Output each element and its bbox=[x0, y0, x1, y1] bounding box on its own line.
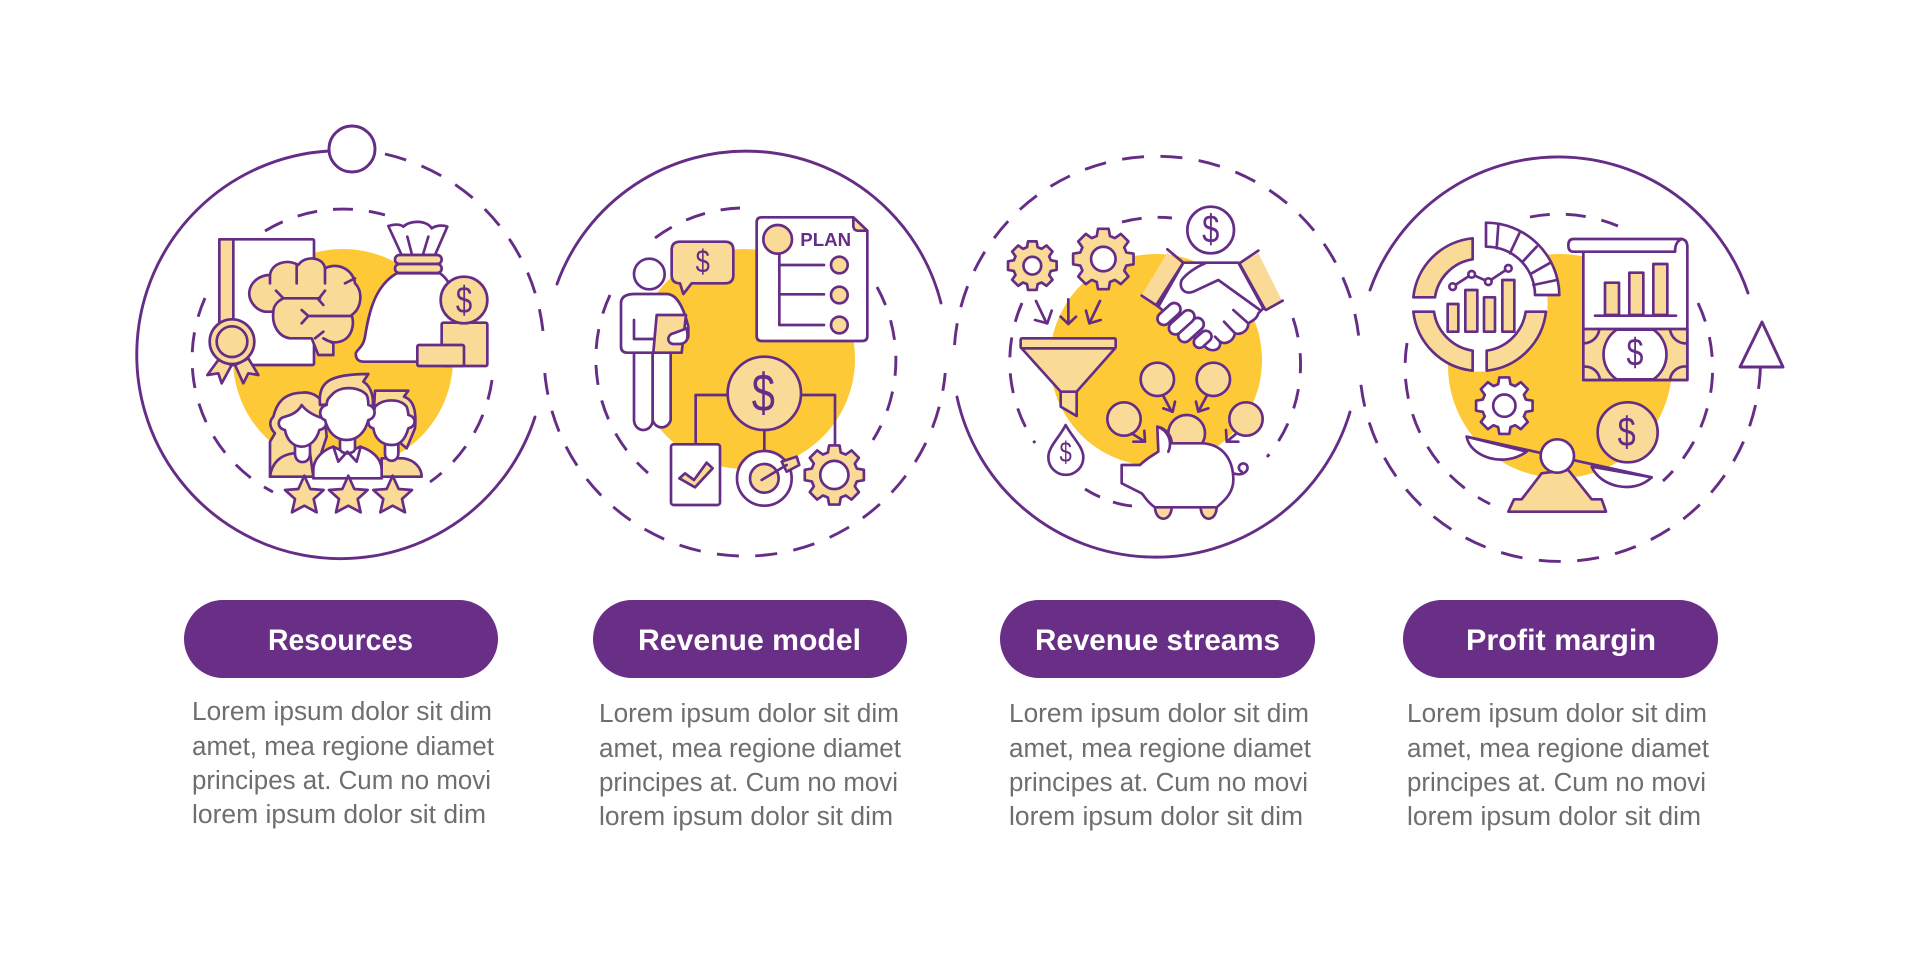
icon: dollar coin: $ bbox=[1618, 408, 1636, 455]
flow connector lines bbox=[696, 395, 835, 453]
icon: revenue model illustration bbox=[621, 217, 867, 506]
text block: profit margin: Lorem ipsum dolor sit dim bbox=[1407, 700, 1707, 728]
icon: central dollar coin bbox=[728, 357, 801, 430]
text block: revenue streams: principes at. Cum no movi bbox=[1009, 769, 1308, 797]
heading pill: Revenue model bbox=[593, 600, 907, 678]
icon: two gears bbox=[1008, 229, 1134, 290]
arrows into funnel bbox=[1035, 299, 1101, 324]
text block: resources: principes at. Cum no movi bbox=[192, 767, 491, 795]
icon: plan document: PLAN bbox=[800, 229, 851, 250]
icon: gear bbox=[1476, 377, 1533, 434]
heading pill: Resources bbox=[184, 600, 498, 678]
text block: profit margin: principes at. Cum no movi bbox=[1407, 769, 1706, 797]
heading pill: Revenue streams: Revenue streams bbox=[1035, 624, 1280, 657]
arrow head bbox=[1740, 322, 1783, 367]
panel: profit margin bbox=[1360, 157, 1783, 831]
icon: central dollar coin: $ bbox=[752, 364, 775, 424]
outer ring bbox=[545, 151, 945, 556]
yellow blob bbox=[635, 249, 855, 469]
icon: dollar coin bbox=[1187, 207, 1234, 253]
icon: revenue streams illustration bbox=[1008, 207, 1283, 519]
icon: money bag with coin and blocks bbox=[356, 222, 487, 366]
heading pill: Resources: Resources bbox=[268, 624, 413, 657]
text block: resources bbox=[192, 698, 494, 829]
icon: piggy bank bbox=[1122, 415, 1248, 519]
icon: person with clipboard bbox=[621, 259, 688, 430]
text block: resources: lorem ipsum dolor sit dim bbox=[192, 801, 486, 829]
text block: resources: Lorem ipsum dolor sit dim bbox=[192, 698, 492, 726]
icon: presentation with banknote bbox=[1568, 239, 1687, 380]
heading pill: Revenue streams bbox=[1000, 600, 1315, 678]
text block: revenue model: lorem ipsum dolor sit dim bbox=[599, 803, 893, 831]
heading pill: Revenue model: Revenue model bbox=[638, 624, 861, 657]
icon: dollar drop: $ bbox=[1060, 437, 1072, 469]
icon: speech bubble with dollar bbox=[672, 242, 733, 294]
icon: donut chart with bars bbox=[1411, 223, 1559, 372]
text block: revenue streams: amet, mea regione diamet bbox=[1009, 735, 1311, 763]
icon: dollar drop bbox=[1048, 425, 1083, 475]
inner dashed ring bbox=[1010, 217, 1301, 506]
text block: revenue streams: lorem ipsum dolor sit dim bbox=[1009, 803, 1303, 831]
text block: revenue model bbox=[599, 700, 901, 831]
icon: handshake bbox=[1142, 249, 1283, 350]
panel: revenue streams bbox=[954, 156, 1360, 831]
icon: plan document bbox=[757, 217, 867, 341]
yellow blob bbox=[1448, 254, 1672, 478]
outer ring bbox=[954, 156, 1360, 557]
icon: three rating stars bbox=[285, 476, 412, 512]
inner dashed ring bbox=[1405, 214, 1713, 504]
text block: revenue streams: Lorem ipsum dolor sit dim bbox=[1009, 700, 1309, 728]
icon: speech bubble with dollar: $ bbox=[696, 244, 710, 280]
icon: balance scale bbox=[1467, 437, 1652, 512]
text block: profit margin: lorem ipsum dolor sit dim bbox=[1407, 803, 1701, 831]
text block: profit margin bbox=[1407, 700, 1709, 831]
panel: revenue model bbox=[545, 151, 945, 831]
text block: revenue model: principes at. Cum no movi bbox=[599, 769, 898, 797]
icon: certificate with medal bbox=[207, 239, 314, 383]
icon: presentation with banknote: $ bbox=[1627, 331, 1643, 374]
icon: team of three bbox=[270, 374, 422, 512]
text block: revenue model: Lorem ipsum dolor sit dim bbox=[599, 700, 899, 728]
icon: coins with arrows bbox=[1107, 363, 1263, 442]
icon: money bag with coin and blocks: $ bbox=[456, 280, 472, 322]
text block: revenue streams bbox=[1009, 700, 1311, 831]
icon: checklist document bbox=[671, 444, 720, 505]
icon: target with arrow bbox=[737, 451, 799, 506]
text block: profit margin: amet, mea regione diamet bbox=[1407, 735, 1709, 763]
panel: resources bbox=[137, 126, 544, 829]
yellow blob bbox=[233, 249, 453, 469]
icon: gear bbox=[805, 445, 864, 505]
heading pill: Profit margin: Profit margin bbox=[1466, 624, 1656, 657]
heading pill: Profit margin bbox=[1403, 600, 1718, 678]
icon: dollar coin: $ bbox=[1202, 207, 1219, 252]
icon: dollar coin bbox=[1598, 402, 1658, 462]
inner dashed ring bbox=[192, 209, 492, 492]
outer ring bbox=[1360, 157, 1760, 561]
yellow blob bbox=[1050, 254, 1262, 466]
text block: revenue model: amet, mea regione diamet bbox=[599, 735, 901, 763]
outer ring with start marker bbox=[137, 126, 544, 559]
icon: resources illustration bbox=[207, 222, 487, 512]
icon: brain bbox=[249, 258, 360, 355]
icon: funnel bbox=[1021, 338, 1116, 416]
text block: resources: amet, mea regione diamet bbox=[192, 733, 494, 761]
inner dashed ring bbox=[596, 208, 896, 473]
icon: profit margin illustration bbox=[1411, 223, 1687, 512]
